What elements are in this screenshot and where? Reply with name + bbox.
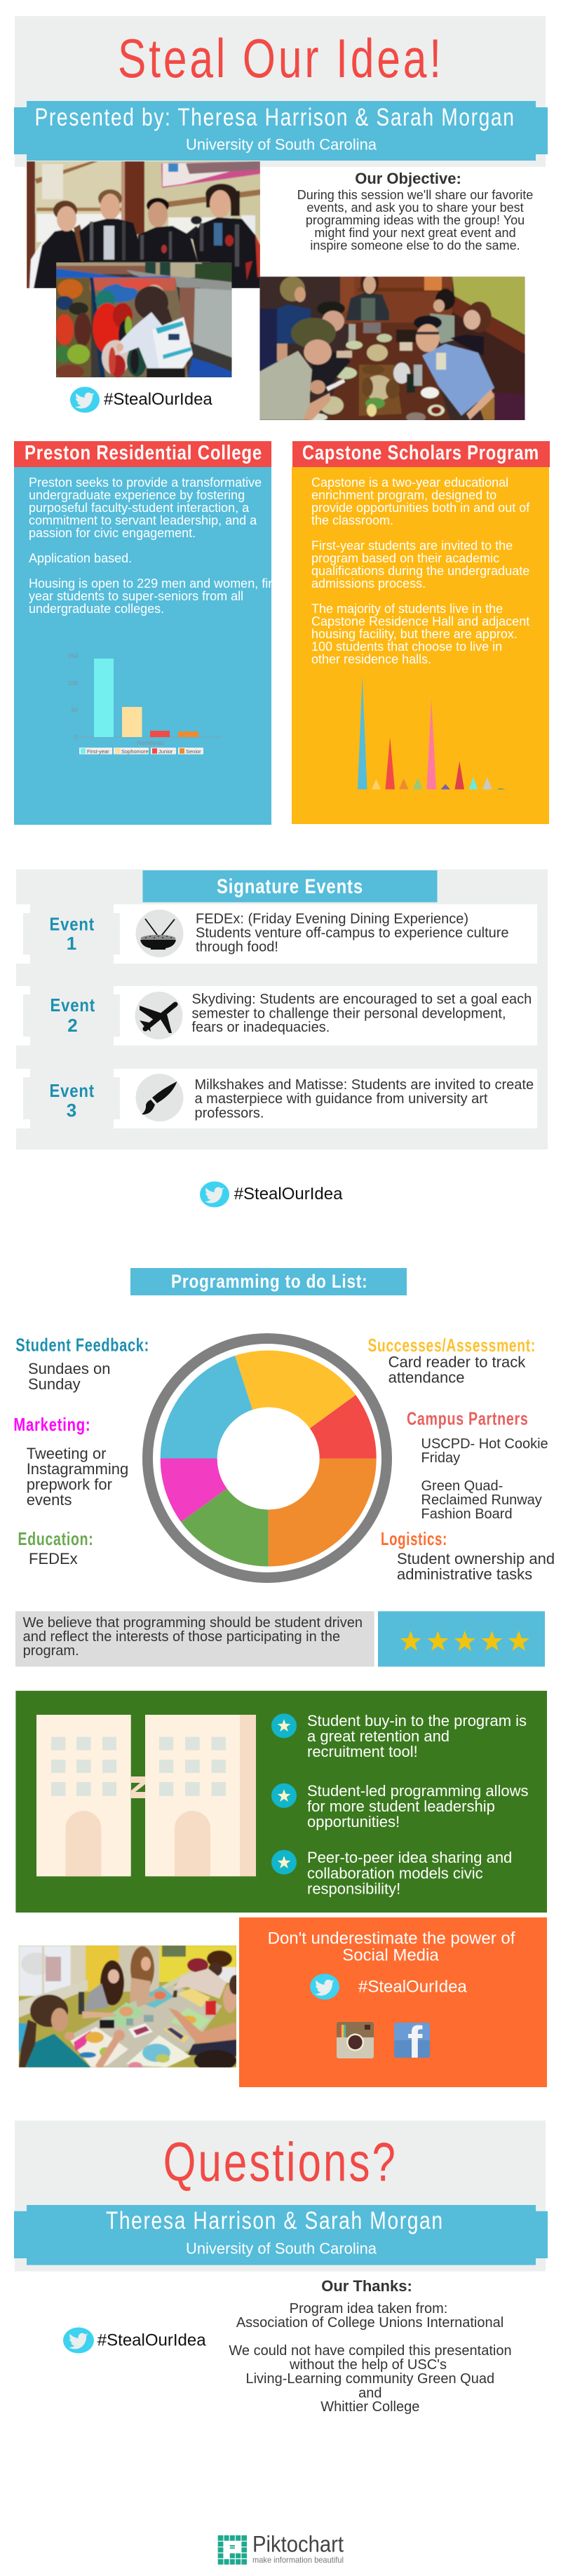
thanks body: Program idea taken from: xyxy=(290,2301,447,2317)
label: education xyxy=(18,1528,94,1567)
takeaway 2 xyxy=(271,1782,529,1830)
questions heading: Questions? xyxy=(163,2131,398,2192)
icon: facebook: f xyxy=(407,2017,423,2068)
social media text: Social Media xyxy=(342,1946,439,1964)
label: marketing xyxy=(13,1414,128,1509)
Capstone body: 100 students that choose to live in xyxy=(311,640,502,654)
icon: facebook xyxy=(394,2023,430,2058)
Capstone body: other residence halls. xyxy=(311,652,431,666)
panel: Capstone xyxy=(292,441,550,824)
event 1 row: 1 xyxy=(67,933,76,954)
photo: dinner group xyxy=(259,271,525,422)
Preston body: commitment to servant leadership, and a xyxy=(29,513,257,527)
thanks body: Living-Learning community Green Quad xyxy=(245,2371,494,2387)
event 2 row: semester to challenge their personal development, xyxy=(192,1006,506,1021)
takeaway 1: recruitment tool! xyxy=(307,1743,418,1760)
takeaway 1: a great retention and xyxy=(307,1727,450,1745)
thanks body: without the help of USC's xyxy=(289,2357,447,2373)
university: University of South Carolina xyxy=(186,136,377,153)
takeaway 1 xyxy=(271,1712,527,1760)
illustration: buildings xyxy=(36,1715,256,1876)
closing banner xyxy=(14,2121,548,2272)
Preston heading: Preston Residential College xyxy=(25,442,262,464)
event 3 row: professors. xyxy=(195,1105,264,1121)
label: campus partners: Green Quad- xyxy=(421,1478,503,1494)
callout: student driven: program. xyxy=(23,1643,79,1659)
Preston body: Housing is open to 229 men and women, first- xyxy=(29,576,286,591)
bar chart: Residents xyxy=(137,739,163,746)
triangle chart xyxy=(358,676,506,790)
label: campus partners: USCPD- Hot Cookie xyxy=(421,1436,548,1452)
donut chart xyxy=(147,1338,387,1578)
takeaway 3: Peer-to-peer idea sharing and xyxy=(307,1849,512,1866)
label: campus partners: Friday xyxy=(421,1450,460,1466)
label: marketing: events xyxy=(27,1491,72,1509)
bar chart: Senior xyxy=(186,748,201,755)
panel: signature events xyxy=(16,870,548,1149)
Capstone body: the classroom. xyxy=(311,513,393,527)
Piktochart logo: make information beautiful xyxy=(252,2555,344,2565)
callout: student driven xyxy=(15,1611,374,1666)
label: student feedback: Student Feedback: xyxy=(15,1334,149,1355)
label: campus partners: Reclaimed Runway xyxy=(421,1492,542,1508)
Preston body: year students to super-seniors from all xyxy=(29,589,243,603)
label: successes xyxy=(367,1335,536,1386)
label: marketing: Marketing: xyxy=(13,1414,90,1435)
objective body: events, and ask you to share your best xyxy=(306,201,524,215)
icon: instagram xyxy=(337,2022,374,2058)
hashtag 3 xyxy=(310,1974,467,2000)
label: student feedback xyxy=(15,1334,149,1393)
label: campus partners xyxy=(407,1408,548,1522)
event 1 row: Event xyxy=(49,913,95,934)
rating stars xyxy=(378,1611,545,1666)
Capstone body: Capstone is a two-year educational xyxy=(311,476,508,490)
event 3 row: 3 xyxy=(67,1100,76,1121)
objective body: During this session we'll share our favorite xyxy=(297,188,533,202)
event 1 row: FEDEx: (Friday Evening Dining Experience) xyxy=(196,912,468,927)
signature events heading: Signature Events xyxy=(217,875,363,898)
label: marketing: Tweeting or xyxy=(27,1445,106,1462)
event 2 row: 2 xyxy=(67,1015,78,1036)
takeaway 2: for more student leadership xyxy=(307,1798,495,1815)
logo mark xyxy=(218,2535,247,2565)
photo: graffiti wall xyxy=(55,262,232,379)
Preston body: undergraduate colleges. xyxy=(29,602,164,616)
bar chart xyxy=(68,652,221,755)
Capstone body: program based on their academic xyxy=(311,551,499,565)
takeaway 1: Student buy-in to the program is xyxy=(307,1712,527,1729)
event 2 row xyxy=(16,986,537,1046)
event 2 row: Skydiving: Students are encouraged to set a goal each xyxy=(192,992,532,1007)
event 1 row xyxy=(16,905,537,964)
closing presenters: Theresa Harrison & Sarah Morgan xyxy=(106,2207,444,2234)
photo: skydiving group xyxy=(27,161,260,288)
event 3 row: Event xyxy=(49,1080,95,1101)
programming heading xyxy=(130,1268,407,1295)
icon: paintbrush xyxy=(136,1074,184,1121)
label: logistics xyxy=(381,1528,555,1583)
objective heading: Our Objective: xyxy=(355,170,461,187)
bar chart: 150 xyxy=(68,652,78,659)
thanks body: We could not have compiled this presentation xyxy=(229,2343,512,2359)
hashtag 2: #StealOurIdea xyxy=(234,1185,343,1203)
programming heading: Programming to do List: xyxy=(171,1271,367,1292)
Preston body: purposeful faculty-student interaction, a xyxy=(29,501,250,515)
hashtag 4: #StealOurIdea xyxy=(97,2331,206,2350)
objective body: inspire someone else to do the same. xyxy=(310,238,520,252)
Capstone body: housing facility, but there are approx. xyxy=(311,627,518,641)
Capstone body: admissions process. xyxy=(311,576,426,591)
event 1 row: Students venture off-campus to experience culture xyxy=(196,925,509,940)
thanks body: Whittier College xyxy=(320,2399,419,2415)
label: marketing: Instagramming xyxy=(27,1460,128,1478)
hashtag 2 xyxy=(200,1181,343,1208)
Capstone body: qualifications during the undergraduate xyxy=(311,564,529,578)
signature events heading xyxy=(143,870,438,902)
Capstone body: provide opportunities both in and out of xyxy=(311,501,530,515)
thanks body: Association of College Unions International xyxy=(236,2315,503,2331)
thanks text xyxy=(229,2277,512,2415)
hashtag 1 xyxy=(70,387,212,412)
hashtag 4 xyxy=(63,2327,206,2354)
title: Steal Our Idea! xyxy=(118,27,444,89)
label: logistics: Logistics: xyxy=(381,1528,447,1549)
takeaway 2: Student-led programming allows xyxy=(307,1782,529,1800)
objective text xyxy=(297,170,533,252)
takeaway 3: collaboration models civic xyxy=(307,1864,483,1882)
Capstone body: Capstone Residence Hall and adjacent xyxy=(311,614,529,628)
objective body: might find your next great event and xyxy=(314,226,516,240)
label: successes: attendance xyxy=(388,1369,464,1386)
Preston body: passion for civic engagement. xyxy=(29,526,196,540)
Capstone body: The majority of students live in the xyxy=(311,602,503,616)
bar chart: 0 xyxy=(74,734,78,741)
event 3 row: a masterpiece with guidance from university art xyxy=(195,1091,488,1107)
Capstone body: enrichment program, designed to xyxy=(311,488,496,502)
event 2 row: fears or inadequacies. xyxy=(192,1020,330,1035)
event 3 row: Milkshakes and Matisse: Students are invited to create xyxy=(195,1077,534,1093)
callout: student driven: and reflect the interests of those participating in the xyxy=(23,1629,340,1645)
label: logistics: administrative tasks xyxy=(397,1565,532,1583)
label: education: Education: xyxy=(18,1528,94,1549)
panel: green takeaways xyxy=(15,1691,547,1913)
takeaway 2: opportunities! xyxy=(307,1813,400,1830)
icon: rice bowl xyxy=(136,910,184,957)
event 2 row: Event xyxy=(50,994,95,1016)
takeaway 3 xyxy=(271,1849,512,1898)
label: campus partners: Fashion Board xyxy=(421,1506,513,1522)
bar chart: 100 xyxy=(68,680,78,687)
label: education: FEDEx xyxy=(29,1550,78,1567)
label: student feedback: Sunday xyxy=(28,1375,81,1393)
bar chart: Sophomore xyxy=(121,748,149,755)
Preston body: Application based. xyxy=(29,551,132,565)
bar chart: Junior xyxy=(158,748,173,755)
label: marketing: prepwork for xyxy=(27,1476,112,1493)
event 3 row xyxy=(16,1069,537,1128)
bar chart: 50 xyxy=(72,706,78,713)
header banner xyxy=(14,16,548,167)
label: successes: Card reader to track xyxy=(388,1354,526,1370)
icon: airplane xyxy=(135,992,182,1039)
thanks heading: Our Thanks: xyxy=(321,2277,412,2295)
panel: Preston xyxy=(14,441,286,825)
thanks body: and xyxy=(358,2386,381,2401)
label: logistics: Student ownership and xyxy=(397,1550,555,1567)
closing university: University of South Carolina xyxy=(186,2240,377,2258)
Preston body: undergraduate experience by fostering xyxy=(29,488,245,502)
Preston body: Preston seeks to provide a transformative xyxy=(29,476,262,490)
Piktochart logo: Piktochart xyxy=(252,2532,344,2557)
event 1 row: through food! xyxy=(196,940,278,955)
Piktochart logo xyxy=(218,2532,344,2565)
photo: students painting xyxy=(19,1946,241,2071)
objective body: programming ideas with the group! You xyxy=(306,213,525,227)
hashtag 1: #StealOurIdea xyxy=(104,390,212,409)
social media text: Don't underestimate the power of xyxy=(268,1929,515,1948)
hashtag 3: #StealOurIdea xyxy=(358,1978,467,1997)
Capstone body: First-year students are invited to the xyxy=(311,539,513,553)
callout: student driven: We believe that programming should be student driven xyxy=(23,1615,363,1631)
panel: social media xyxy=(239,1917,547,2087)
bar chart: First-year xyxy=(87,748,109,755)
takeaway 3: responsibility! xyxy=(307,1880,400,1898)
label: student feedback: Sundaes on xyxy=(28,1360,110,1377)
